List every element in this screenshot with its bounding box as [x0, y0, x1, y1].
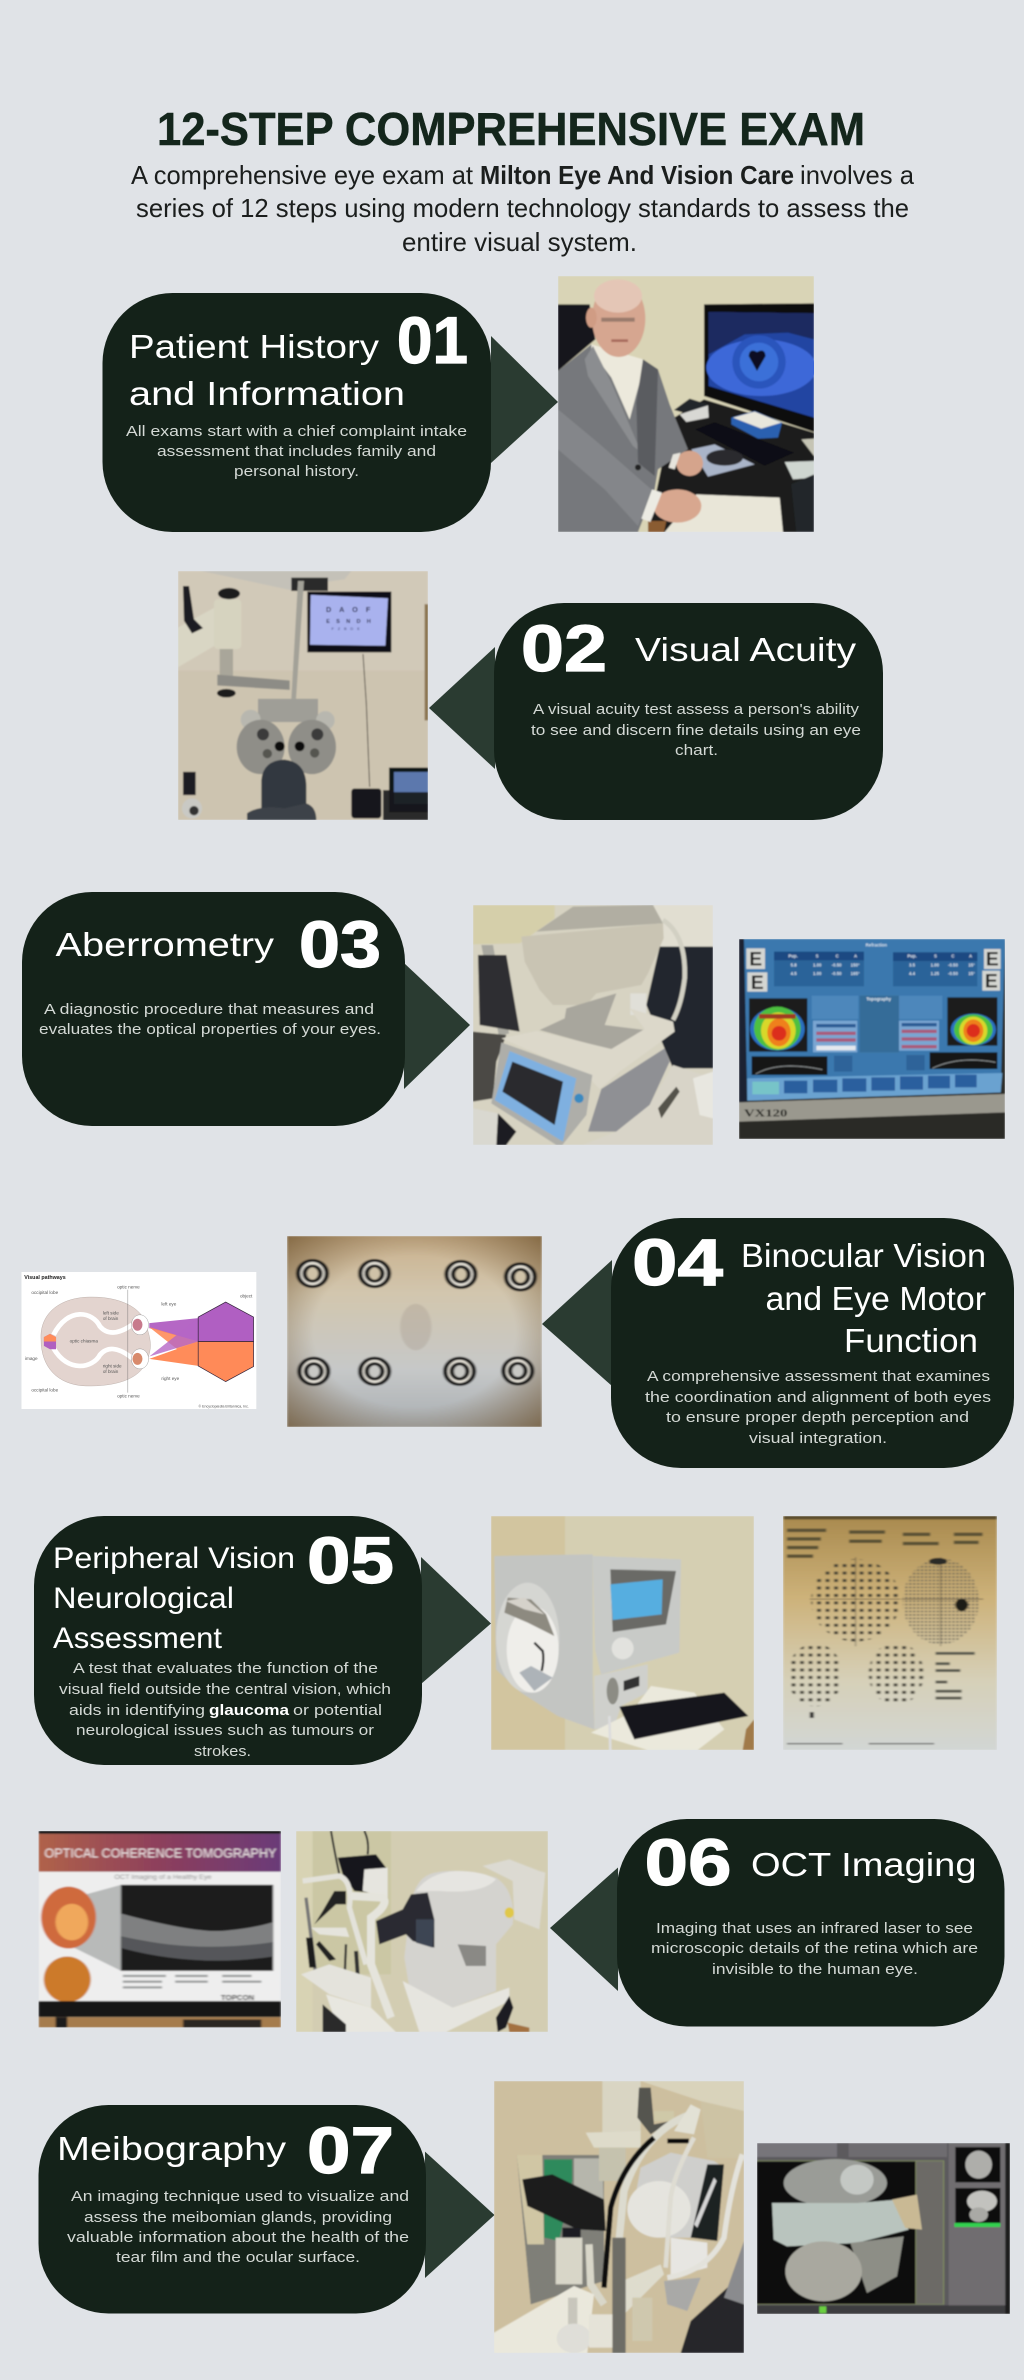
photo: aberrometry map screen: -0.50	[948, 963, 958, 968]
photo: aberrometry map screen: C	[836, 954, 839, 959]
description 02: chart.	[675, 742, 718, 759]
title: 12-STEP COMPREHENSIVE EXAM	[157, 103, 865, 155]
heading 04: Binocular Vision	[741, 1237, 986, 1274]
diagram: visual pathways: right side	[103, 1364, 122, 1369]
heading 04: and Eye Motor	[766, 1280, 986, 1317]
description 07: assess the meibomian glands, providing	[84, 2209, 392, 2226]
panel: step 02 visual acuity	[178, 571, 883, 820]
photo: aberrometry map screen: Pup.	[788, 954, 798, 959]
description 05: visual field outside the central vision, which	[59, 1681, 391, 1698]
description 07: An imaging technique used to visualize and	[71, 2188, 409, 2205]
photo: aberrometry map screen: 1.25	[931, 971, 940, 976]
diagram: visual pathways: Visual pathways	[24, 1275, 66, 1281]
diagram: visual pathways: left eye	[161, 1302, 177, 1307]
photo: visual field analyzer	[491, 1516, 754, 1750]
heading 01: Patient History	[129, 328, 380, 365]
panel: step 04 binocular vision	[21, 1218, 1014, 1468]
photo: aberrometry map screen: E	[749, 950, 762, 971]
number 07: 07	[307, 2113, 394, 2187]
description 05	[59, 1660, 391, 1760]
photo: phoropter and eye chart: E S N D H	[326, 619, 373, 625]
callout pointer 03	[404, 963, 470, 1089]
description 02: A visual acuity test assess a person's ability	[533, 701, 860, 718]
diagram: visual pathways: right eye	[161, 1376, 180, 1381]
panel: step 05 peripheral vision	[34, 1516, 997, 1765]
description 07: tear film and the ocular surface.	[116, 2249, 360, 2266]
photo: ring targets on wall	[287, 1236, 542, 1427]
panel: step 01 patient history	[102, 276, 816, 532]
description 07: valuable information about the health of the	[67, 2229, 409, 2246]
diagram: visual pathways: optic nerve	[117, 1285, 140, 1289]
photo: aberrometry map screen: 1.00	[931, 963, 940, 968]
photo: meibography software screen	[757, 2143, 1010, 2314]
diagram: visual pathways: optic chiasma	[70, 1339, 98, 1343]
description 04: the coordination and alignment of both eyes	[645, 1389, 991, 1406]
photo: phoropter and eye chart	[178, 571, 428, 820]
photo: aberrometry map screen: Refraction	[866, 942, 887, 947]
heading 07: Meibography	[57, 2130, 287, 2167]
photo: visual field printout	[783, 1516, 997, 1750]
callout bubble 05	[34, 1516, 422, 1765]
diagram: visual pathways: optic nerve	[117, 1394, 140, 1399]
photo: aberrometry map screen: 165°	[851, 971, 860, 976]
photo: aberrometry map screen: E	[986, 950, 999, 971]
number 03: 03	[299, 907, 381, 981]
number 06: 06	[645, 1825, 732, 1899]
description 02	[531, 701, 861, 759]
photo: aberrometry map screen: -0.50	[832, 963, 842, 968]
description 06: invisible to the human eye.	[712, 1961, 918, 1978]
callout pointer 04	[542, 1260, 612, 1386]
photo: aberrometry map screen: 15°	[968, 971, 975, 976]
photo: aberrometry map screen: 4.4	[909, 971, 916, 976]
photo: aberrometry map screen: S	[816, 954, 819, 959]
description 01: personal history.	[234, 463, 359, 480]
number 02: 02	[521, 611, 607, 685]
photo: doctor at desk	[558, 276, 814, 532]
callout pointer 01	[491, 336, 558, 463]
heading 05: Assessment	[53, 1622, 223, 1655]
diagram: visual pathways: of brain	[103, 1369, 119, 1374]
heading 01: and Information	[129, 375, 405, 412]
intro paragraph: entire visual system.	[402, 227, 637, 257]
description 04: to ensure proper depth perception and	[666, 1409, 969, 1426]
diagram: visual pathways: occipital lobe	[31, 1290, 59, 1295]
heading 03: Aberrometry	[56, 926, 275, 963]
photo: aberrometry map screen	[739, 939, 1005, 1139]
callout bubble 06	[617, 1819, 1004, 2026]
callout bubble 03	[22, 892, 405, 1126]
photo: aberrometry map screen: 150°	[851, 963, 860, 968]
description 01: All exams start with a chief complaint intake	[126, 423, 467, 440]
panel: step 07 meibography	[38, 2081, 1010, 2353]
description 06: microscopic details of the retina which are	[651, 1940, 978, 1957]
diagram: visual pathways: © Encyclopædia Britannica, Inc.	[199, 1404, 249, 1408]
description 03: evaluates the optical properties of your eyes.	[39, 1021, 381, 1038]
callout pointer 02	[429, 647, 495, 769]
description 01: assessment that includes family and	[157, 443, 436, 460]
callout pointer 05	[421, 1557, 491, 1684]
description 04: visual integration.	[749, 1430, 887, 1447]
panel: step 03 aberrometry	[22, 892, 1005, 1145]
photo: aberrometry map screen: 1.00	[813, 963, 822, 968]
heading 02: Visual Acuity	[635, 631, 857, 668]
photo: aberrometry map screen: C	[951, 954, 954, 959]
description 05: glaucoma	[209, 1702, 290, 1719]
diagram: visual pathways: occipital lobe	[31, 1387, 59, 1392]
intro paragraph: involves a	[800, 160, 915, 190]
heading 05: Peripheral Vision	[53, 1542, 295, 1575]
heading 05	[53, 1542, 295, 1655]
photo: OCT poster on screen: TOPCON	[221, 1993, 254, 2002]
heading 04: Function	[844, 1322, 978, 1359]
photo: aberrometry map screen: E	[751, 973, 764, 994]
description 03	[39, 1001, 381, 1038]
description 05: A test that evaluates the function of the	[73, 1660, 378, 1677]
diagram: visual pathways: of brain	[103, 1316, 119, 1321]
description 02: to see and discern fine details using an eye	[531, 722, 861, 739]
callout bubble 02	[494, 603, 883, 820]
callout pointer 06	[550, 1868, 618, 1991]
photo: phoropter and eye chart: F Z B D E	[332, 626, 361, 631]
photo: slit lamp meibography camera	[494, 2081, 744, 2353]
callout pointer 07	[425, 2152, 494, 2278]
photo: aberrometry map screen: 3.5	[909, 963, 916, 968]
description 05: or potential	[293, 1702, 382, 1719]
photo: phoropter and eye chart: D A O F	[326, 605, 373, 614]
photo: aberrometry map screen: 4.5	[791, 971, 797, 976]
number 04: 04	[632, 1225, 723, 1299]
diagram: visual pathways: left side	[103, 1311, 119, 1315]
photo: aberrometry map screen: Pup.	[907, 954, 917, 959]
photo: aberrometry map screen: 1.00	[813, 971, 822, 976]
number 01: 01	[397, 303, 468, 377]
callout bubble 04	[611, 1218, 1014, 1468]
photo: aberrometry map screen: E	[985, 972, 998, 993]
heading 01	[129, 328, 405, 412]
photo: OCT poster on screen	[38, 1831, 281, 2028]
description 03: A diagnostic procedure that measures and	[44, 1001, 374, 1018]
diagram: visual pathways: image	[25, 1356, 38, 1361]
panel: step 06 OCT imaging	[38, 1819, 1004, 2032]
heading 04	[741, 1237, 986, 1359]
photo: aberrometry map screen: A	[969, 954, 973, 959]
photo: aberrometry map screen: S	[934, 954, 937, 959]
photo: aberrometry map screen: -0.50	[948, 971, 958, 976]
diagram: visual pathways: object	[240, 1294, 253, 1298]
description 01	[126, 423, 467, 480]
description 05: aids in identifying	[69, 1702, 205, 1719]
photo: aberrometry map screen: 5.8	[791, 963, 797, 968]
description 06: Imaging that uses an infrared laser to see	[656, 1920, 973, 1937]
heading 05: Neurological	[53, 1582, 234, 1615]
intro paragraph: Milton Eye And Vision Care	[480, 160, 794, 190]
intro paragraph	[131, 160, 915, 257]
photo: aberrometry map screen: A	[854, 954, 858, 959]
description 04	[645, 1368, 991, 1447]
photo: aberrometer device	[473, 905, 713, 1145]
photo: aberrometry map screen: Topography	[866, 996, 892, 1001]
photo: aberrometry map screen: VX120	[744, 1108, 787, 1119]
description 04: A comprehensive assessment that examines	[647, 1368, 990, 1385]
description 06	[651, 1920, 978, 1978]
intro paragraph: A comprehensive eye exam at	[131, 160, 474, 190]
description 05: strokes.	[194, 1743, 251, 1760]
intro paragraph: series of 12 steps using modern technology standards to assess the	[136, 193, 909, 223]
callout bubble 01	[102, 293, 491, 532]
number 05: 05	[307, 1523, 394, 1597]
description 07	[67, 2188, 409, 2266]
photo: aberrometry map screen: -0.50	[832, 971, 842, 976]
photo: aberrometry map screen: 15°	[968, 963, 975, 968]
diagram: visual pathways	[22, 1272, 256, 1409]
heading 06: OCT Imaging	[751, 1846, 976, 1883]
photo: OCT machine	[296, 1831, 548, 2032]
photo: OCT poster on screen: OCT Imaging of a Healthy Eye	[114, 1874, 212, 1881]
callout bubble 07	[38, 2105, 426, 2314]
description 05: neurological issues such as tumours or	[76, 1722, 374, 1739]
